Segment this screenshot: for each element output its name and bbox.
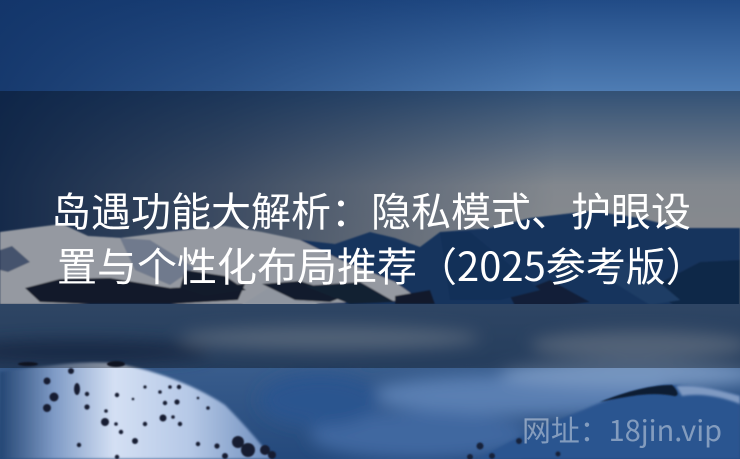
cloud sea (0, 304, 740, 459)
snowy hill bottom left (0, 361, 276, 459)
watermark: 网址：18jin.vip (522, 408, 722, 450)
title line 2: 置与个性化布局推荐（2025参考版） (57, 235, 706, 293)
hillside trees (18, 361, 276, 459)
snowy ridge bottom right (467, 385, 740, 459)
distant mountains (0, 211, 740, 320)
title line 1: 岛遇功能大解析：隐私模式、护眼设 (51, 180, 691, 238)
dark translucent band (0, 91, 740, 368)
sky (0, 0, 740, 320)
